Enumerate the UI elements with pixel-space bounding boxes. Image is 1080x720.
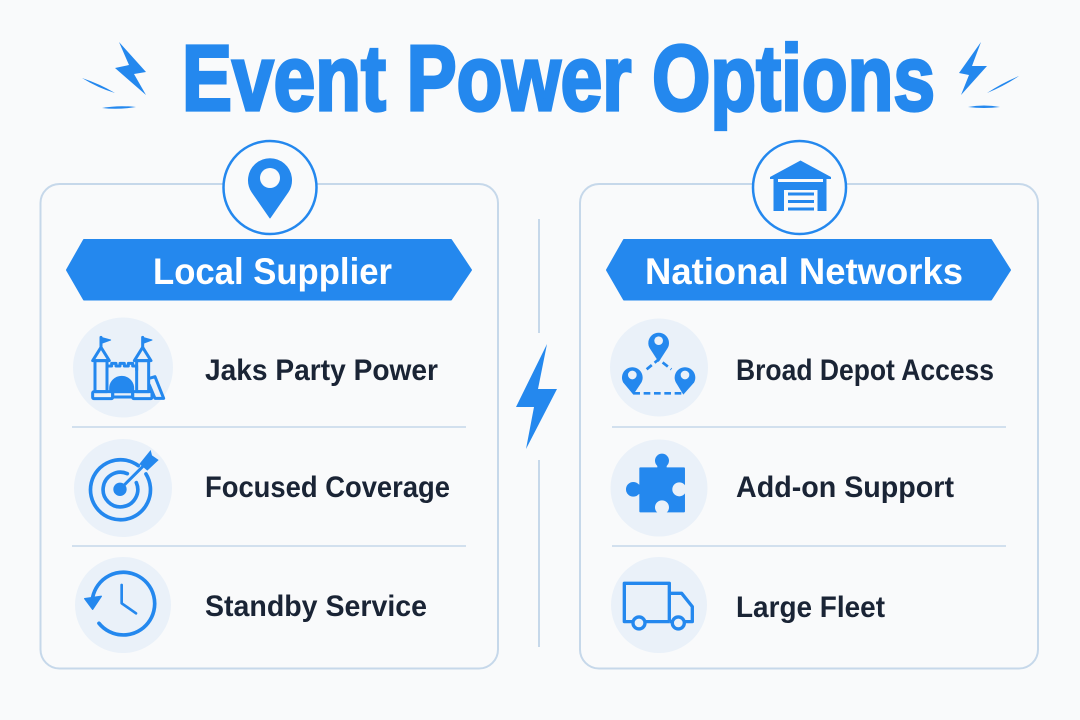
row: Add-on Support xyxy=(610,440,954,536)
center divider line xyxy=(538,219,540,647)
label: Focused Coverage xyxy=(205,471,450,504)
label: Jaks Party Power xyxy=(205,354,438,387)
heading banner: local supplier: Local Supplier xyxy=(153,251,392,292)
heading banner: national networks xyxy=(607,240,1010,300)
row: Large Fleet xyxy=(611,557,885,653)
icon: target with arrow xyxy=(90,450,159,520)
label: Broad Depot Access xyxy=(736,354,994,387)
icon: delivery truck xyxy=(624,583,692,629)
label: Add-on Support xyxy=(736,471,954,504)
panel: local supplier xyxy=(40,141,498,668)
icon: location pin badge xyxy=(224,141,316,234)
icon: three connected map pins xyxy=(622,333,695,395)
row: Jaks Party Power xyxy=(73,318,438,418)
label: Standby Service xyxy=(205,590,427,623)
icon: garage badge xyxy=(753,141,846,234)
row: Broad Depot Access xyxy=(610,318,994,416)
icon: right lightning sparks xyxy=(959,42,1019,108)
icon: bouncy castle xyxy=(93,337,164,399)
panel: national networks xyxy=(580,141,1038,668)
icon: clock with back arrow xyxy=(85,572,155,635)
label: Large Fleet xyxy=(736,591,885,624)
heading banner: local supplier xyxy=(67,240,471,300)
icon: left lightning sparks xyxy=(82,42,146,109)
icon: center lightning bolt xyxy=(516,344,557,449)
row: Standby Service xyxy=(75,557,427,653)
heading banner: national networks: National Networks xyxy=(645,251,963,292)
icon: puzzle piece xyxy=(626,454,686,514)
row: Focused Coverage xyxy=(74,439,450,537)
